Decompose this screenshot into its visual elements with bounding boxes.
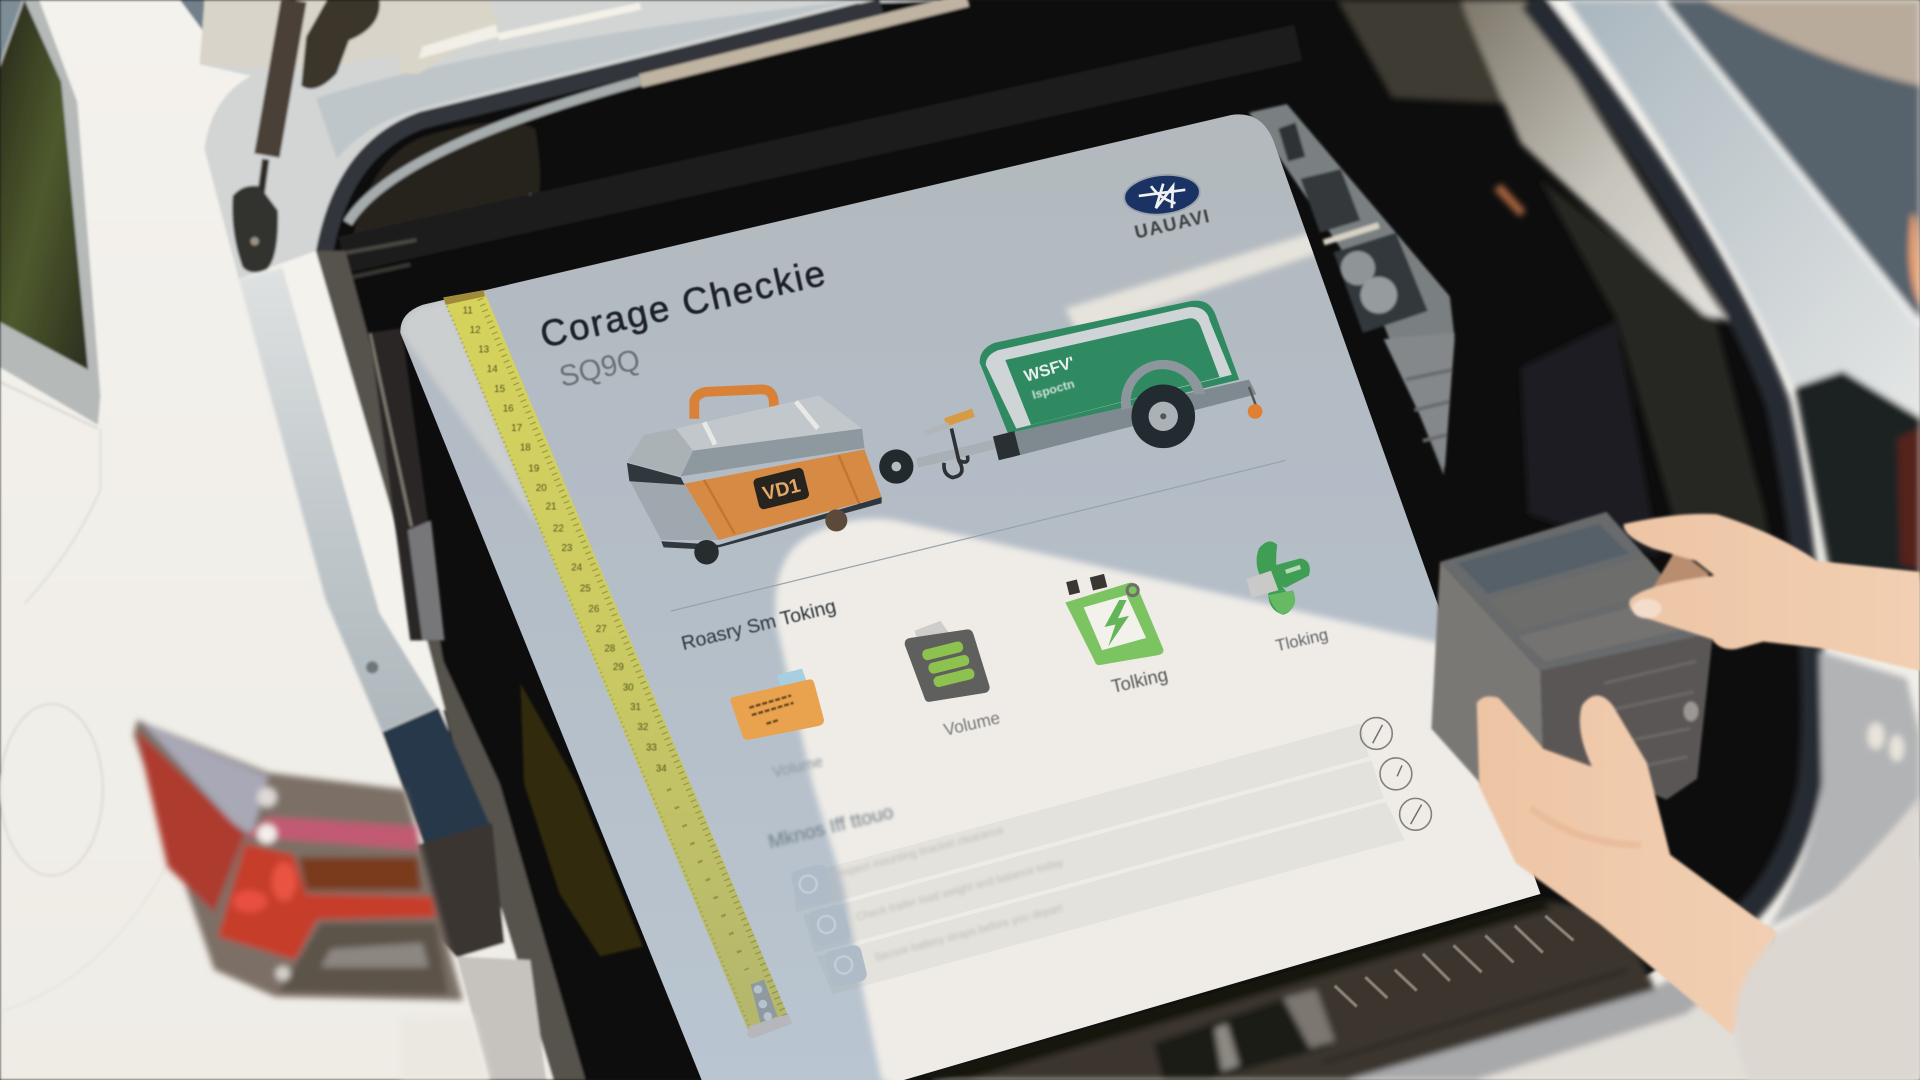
tape numbers: 32 [637,722,648,733]
tape numbers: 14 [487,364,498,375]
row 2 [803,758,1412,953]
sill ribs [1335,916,1573,1007]
tape numbers: 18 [520,443,531,454]
row 3: Secure battery straps before you depart [873,902,1064,964]
lower white bumper [1469,857,1920,1080]
pillar channel [239,267,438,732]
trunk opening interior [316,0,1813,1080]
label: tioking: Tloking [1274,625,1330,655]
interior cargo rail [343,43,1298,255]
lid hinge [398,0,500,73]
tape numbers: 34 [656,763,667,774]
brand logo [1122,171,1212,243]
tape numbers: 12 [470,325,481,336]
tape numbers: 27 [596,624,607,635]
lid panel [200,0,414,71]
row 2: Check trailer load weight and balance today [855,857,1065,924]
tape numbers: 24 [571,563,583,574]
measuring tape [443,290,792,1038]
box front face [1540,633,1713,800]
checklist rows [790,718,1431,994]
tape numbers: 26 [588,604,600,615]
upper hand and arm [1624,514,1920,671]
title: Corage Checkie [536,252,831,356]
card left lighter corner [400,299,539,527]
door jamb [1795,371,1920,578]
tape numbers: 25 [580,583,591,594]
side panel [1769,651,1920,927]
yellow stored box [520,683,643,956]
icon: green charging battery [1065,574,1163,665]
box top face [1440,512,1713,671]
door gasket left [316,251,585,1080]
tape numbers: 31 [630,702,641,713]
divider [671,460,1286,611]
tape numbers: 22 [553,523,564,534]
tape numbers: 33 [646,743,657,754]
row 1: Inspect mounting bracket clearance [834,824,1005,881]
tape lower tick marks [669,789,747,970]
lid gaskets [323,7,882,260]
lid inner surface [202,0,961,279]
left window [0,0,100,425]
icon: trailer with hitch: Ispoctn [1030,377,1076,402]
section heading: Roasry Sm Toking [679,595,838,655]
panel: checklist card [400,114,1580,1080]
boot sill [900,900,1656,1080]
dark pillar behind tail light [382,708,492,857]
road background [1653,0,1920,331]
left stored items [370,328,444,640]
body crease [24,429,100,604]
brand logo: UAUAVI [1133,205,1212,243]
brown side trim [1539,179,1776,576]
stacked boxes behind card [370,104,1455,956]
lid side panel [1460,0,1728,321]
tape numbers: 30 [623,683,634,694]
box left face [1431,562,1543,786]
trunk interior right side [900,0,1920,1080]
tape numbers: 19 [528,463,539,474]
row 3 [817,798,1431,994]
tape numbers: 21 [546,501,556,512]
tape numbers [463,305,667,774]
lid strut [232,0,294,273]
tape numbers: 15 [494,384,506,395]
icon: green propeller [1247,541,1310,615]
tape numbers: 29 [613,662,624,673]
icon: orange folder [730,669,824,740]
interior headrest shape [351,122,540,251]
door gasket [1531,0,1813,931]
orange interior sliver [1494,184,1526,217]
fuel door [0,704,103,876]
tape numbers: 28 [604,643,616,654]
icon: trailer with hitch: WSFV' [1022,353,1077,386]
dark interior trim panel [1521,321,1659,557]
tail light [133,720,463,1000]
icon: trailer with hitch [879,301,1262,484]
tape numbers: 16 [503,403,514,414]
lower body trim [457,956,546,1080]
pillar white strip [282,251,456,715]
row 1 [790,718,1392,912]
toolbox label: VD1 [760,475,803,505]
shirt sleeve [1735,796,1920,1080]
checklist section heading: Mknos Iff ttouo [766,801,896,853]
lower hand and arm [1477,696,1777,1035]
upper trim panel [1337,0,1518,104]
tape numbers: 13 [478,345,490,356]
subtitle: SQ9Q [556,343,643,394]
tape numbers: 20 [536,483,547,494]
icon: grey battery [905,621,990,702]
label: volume faint: Volume [771,753,825,781]
icon: toolbox [627,389,882,564]
interior light fleck [508,193,555,222]
sunlight patch [775,229,1580,1080]
door exterior [1567,0,1920,418]
road behind car left [180,0,206,33]
tape numbers: 11 [463,305,473,316]
tape numbers: 17 [511,423,522,434]
held storage box [1431,512,1713,800]
tape numbers: 23 [561,543,573,554]
label: toking: Tolking [1109,664,1170,697]
toolbox label [752,467,810,510]
label: volume: Volume [942,707,1002,740]
tape metal end [747,1014,792,1038]
